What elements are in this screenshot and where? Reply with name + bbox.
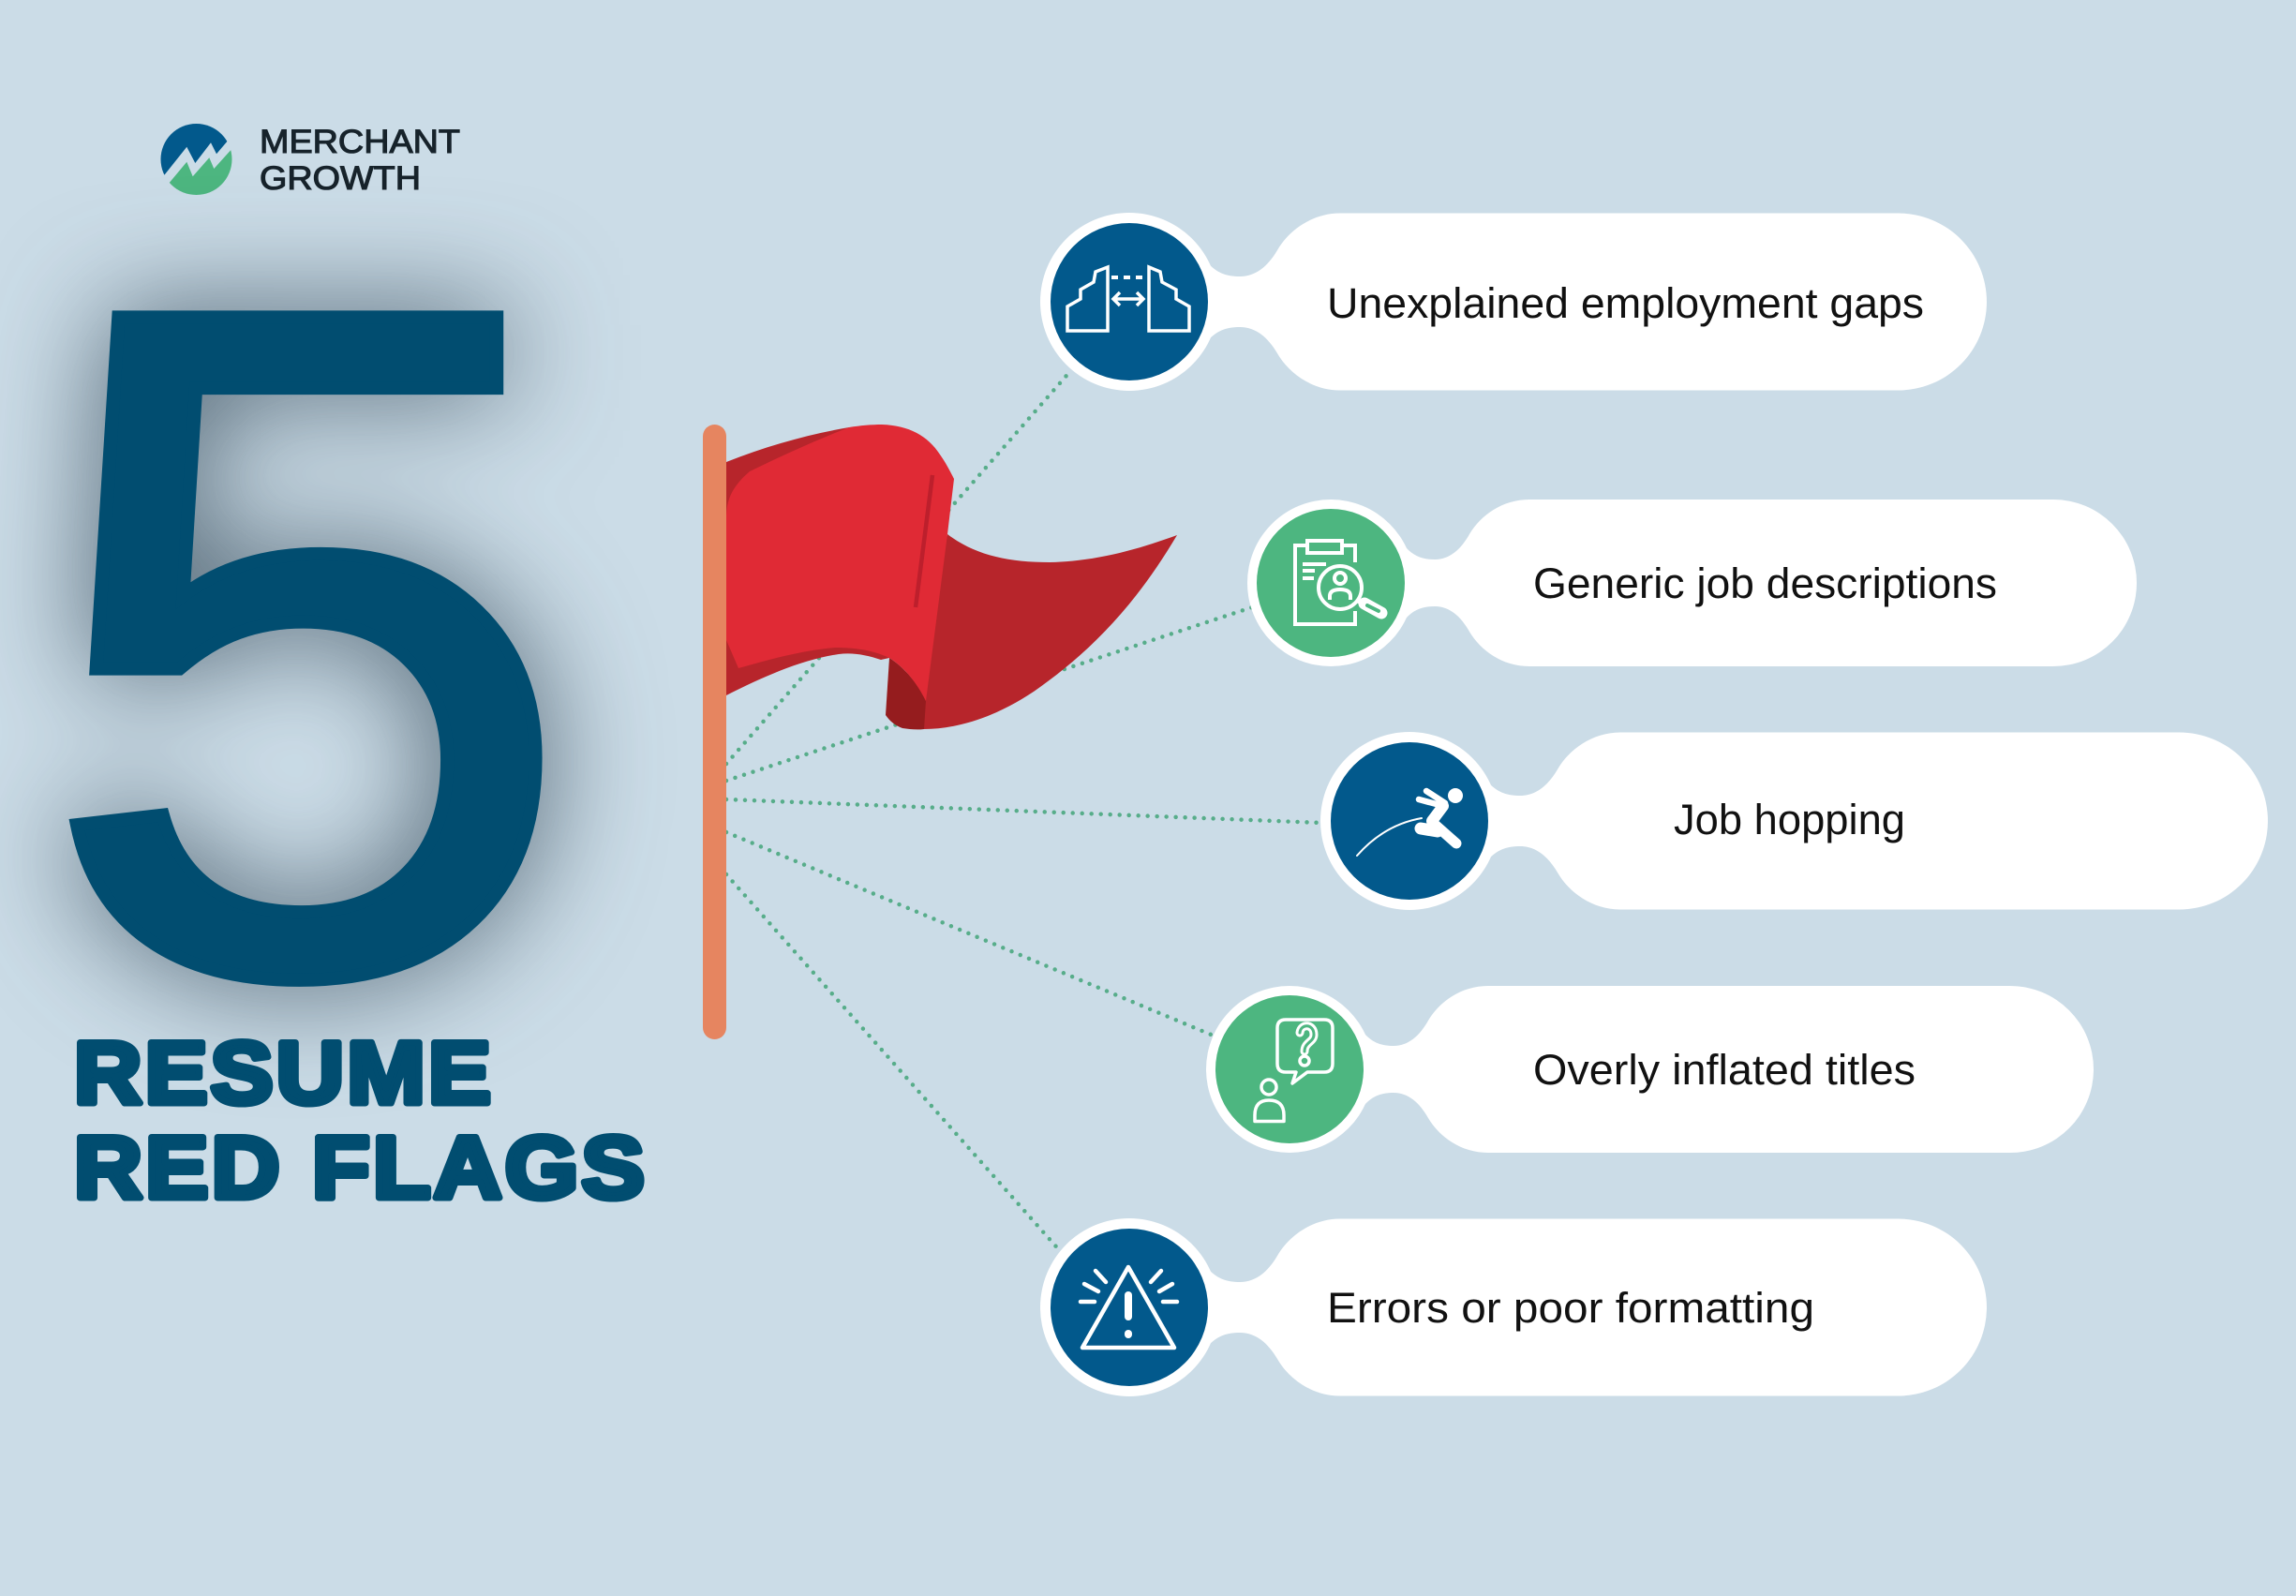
- icon: gap between two blocks: [1067, 267, 1189, 331]
- title: resume red flags: [74, 1023, 648, 1216]
- bubble: [1247, 500, 2137, 666]
- logo wordmark: [260, 124, 460, 197]
- bubble: [1320, 732, 2268, 910]
- flag pole: [703, 425, 726, 1039]
- bubble: [1040, 1218, 1987, 1396]
- red flag: [726, 425, 1177, 729]
- infographic canvas: [11, 124, 2268, 1396]
- icon: person with question bubble: [1255, 1020, 1333, 1121]
- item 2: generic job descriptions: [1247, 500, 2137, 666]
- item 5: errors or poor formatting: [1040, 1218, 1987, 1396]
- icon: jumping person: [1357, 788, 1463, 856]
- icon: warning triangle: [1081, 1267, 1177, 1348]
- icon: clipboard and magnifier: [1295, 541, 1381, 624]
- logo wordmark: GROWTH: [260, 160, 421, 197]
- label: Job hopping: [1674, 796, 1905, 843]
- label: Errors or poor formatting: [1327, 1284, 1814, 1332]
- label: Overly inflated titles: [1533, 1046, 1916, 1094]
- logo wordmark: MERCHANT: [260, 124, 460, 160]
- bubble: [1040, 213, 1987, 391]
- item 1: unexplained employment gaps: [1040, 213, 1987, 391]
- title: resume red flags: RED FLAGS: [74, 1118, 648, 1216]
- item 4: overly inflated titles: [1206, 986, 2094, 1153]
- item 3: job hopping: [1320, 732, 2268, 910]
- icon: logo mark: [161, 124, 232, 195]
- logo: Merchant Growth: [161, 124, 460, 195]
- dotted connector lines: [726, 369, 1322, 1253]
- bubble: [1206, 986, 2094, 1153]
- label: Unexplained employment gaps: [1327, 279, 1924, 327]
- title: resume red flags: RESUME: [74, 1023, 494, 1122]
- big number 5: 5: [38, 111, 576, 1172]
- label: Generic job descriptions: [1533, 559, 1997, 607]
